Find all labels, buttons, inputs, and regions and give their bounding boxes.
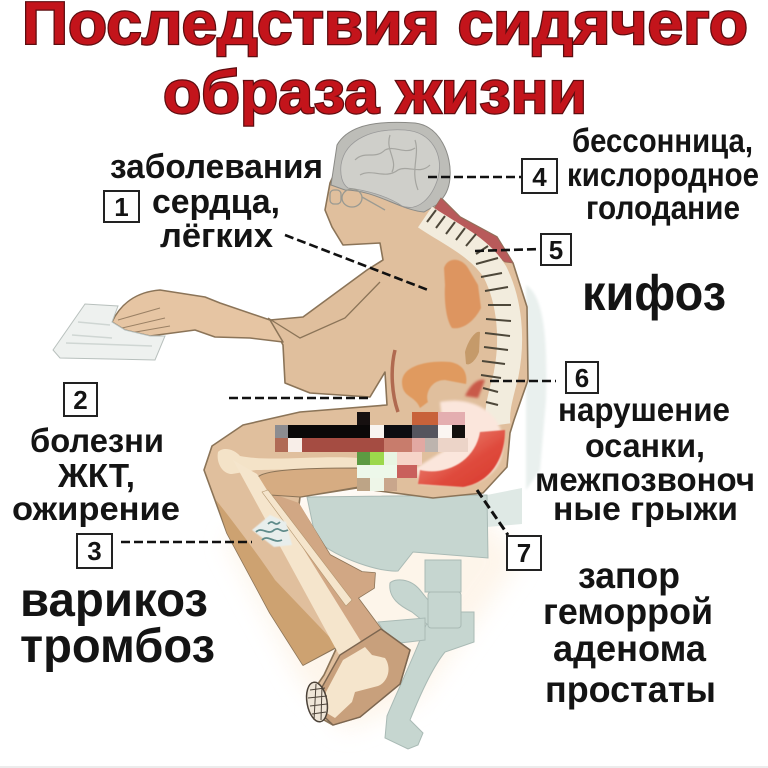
arm and hand	[112, 282, 380, 342]
label 5: kyphosis	[541, 234, 726, 321]
skull and brain	[331, 122, 450, 212]
label 2: digestive: ЖКТ,	[57, 457, 135, 494]
chair	[307, 488, 522, 749]
label 2: digestive: 2	[73, 385, 88, 415]
knee and thigh cloth	[257, 468, 358, 497]
label 3: varicose: 3	[87, 536, 102, 566]
label 5: kyphosis: кифоз	[582, 265, 726, 321]
label 6: posture	[535, 362, 755, 527]
label 6: posture: межпозвоноч	[535, 461, 755, 498]
foot	[312, 629, 410, 725]
leader lines	[121, 177, 556, 542]
label 4: insomnia	[522, 122, 759, 226]
lower leg shade	[216, 500, 338, 665]
title: образа жизни	[163, 59, 587, 126]
intestine	[402, 362, 466, 408]
label 5: kyphosis: 5	[549, 235, 563, 265]
label 6: posture: нарушение	[558, 391, 730, 428]
label 2: digestive: болезни	[30, 422, 164, 459]
pelvis and rectum zone	[416, 401, 503, 486]
label 7: pelvic	[507, 536, 716, 710]
neck tension zone	[430, 198, 513, 263]
label 6: posture: ные грыжи	[553, 490, 738, 527]
liver	[465, 332, 480, 364]
label 4: insomnia: 4	[532, 162, 547, 192]
label 3: varicose: варикоз	[20, 574, 208, 627]
censor pixel blocks	[275, 412, 468, 491]
label 1: heart and lungs: лёгких	[160, 217, 273, 255]
label 1: heart and lungs: сердца,	[152, 183, 280, 221]
background glow	[225, 480, 520, 730]
glasses	[330, 189, 385, 210]
label 3: varicose	[20, 534, 215, 673]
calf cloth	[262, 490, 381, 648]
label 1: heart and lungs: 1	[114, 192, 129, 222]
label 7: pelvic: 7	[517, 538, 531, 568]
label 7: pelvic: простаты	[545, 669, 716, 710]
label 2: digestive	[12, 383, 180, 527]
spine	[425, 210, 511, 425]
label 4: insomnia: голодание	[586, 189, 740, 226]
label 1: heart and lungs	[104, 148, 323, 255]
label 7: pelvic: запор	[578, 555, 680, 596]
body	[204, 132, 528, 725]
heart and lung	[444, 260, 481, 328]
keyboard	[53, 304, 165, 360]
label 6: posture: осанки,	[585, 427, 705, 464]
toes	[304, 681, 330, 723]
backrest	[526, 285, 546, 490]
label 3: varicose: тромбоз	[20, 620, 215, 673]
label 2: digestive: ожирение	[12, 490, 180, 527]
label 6: posture: 6	[575, 363, 589, 393]
shin bones	[233, 460, 365, 662]
varicose veins	[252, 515, 292, 547]
title	[22, 0, 748, 126]
label 7: pelvic: геморрой	[543, 591, 713, 632]
label 7: pelvic: аденома	[553, 628, 706, 669]
illustration: seated person with chair	[53, 122, 546, 749]
aorta	[392, 350, 398, 412]
femur	[218, 449, 358, 474]
label 1: heart and lungs: заболевания	[110, 148, 323, 186]
